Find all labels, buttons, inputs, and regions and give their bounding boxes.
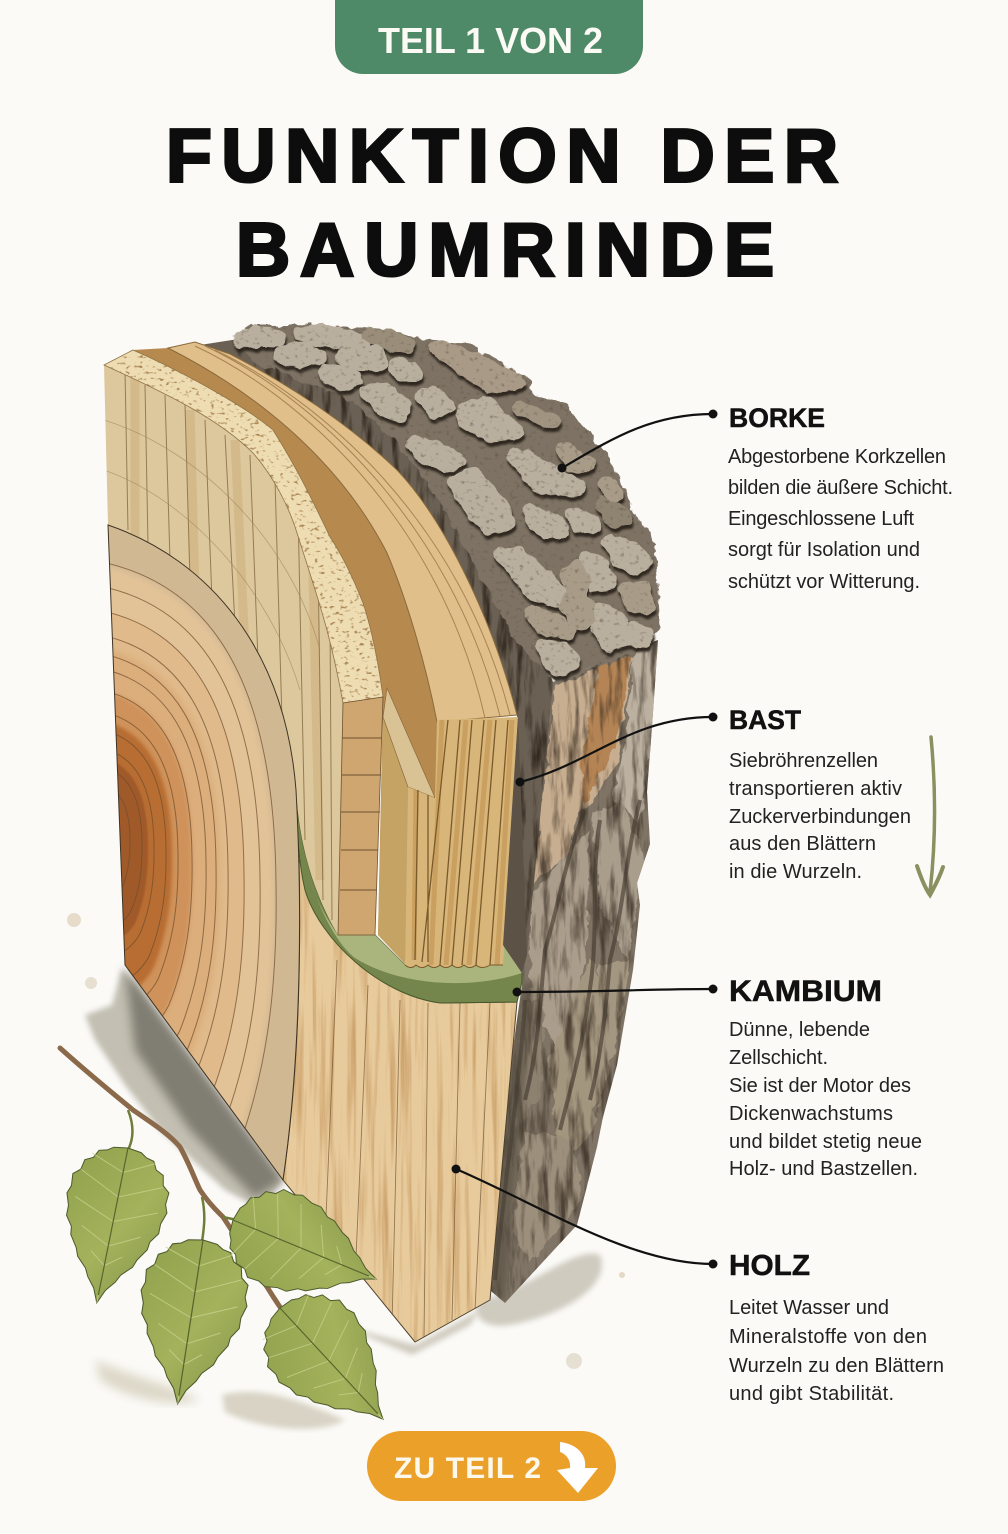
leaf 1 bbox=[47, 1138, 178, 1313]
label: Borke: bilden die äußere Schicht. bbox=[728, 477, 953, 499]
header badge bbox=[335, 0, 643, 74]
title: FUNKTION DER bbox=[166, 114, 838, 198]
sapwood front bbox=[280, 860, 520, 1350]
label: Bast: BAST bbox=[729, 705, 801, 735]
label: Bast: aus den Blättern bbox=[729, 833, 876, 855]
leader line: Bast bbox=[516, 712, 718, 786]
label: Kambium: KAMBIUM bbox=[729, 975, 882, 1008]
label: Holz: Leitet Wasser und bbox=[729, 1297, 889, 1319]
title: BAUMRINDE bbox=[236, 208, 774, 292]
inner tan panel bbox=[104, 365, 343, 935]
title bbox=[166, 114, 838, 292]
label: Bast: Zuckerverbindungen bbox=[729, 806, 911, 828]
twig bbox=[60, 1048, 280, 1307]
cork strip bbox=[100, 345, 390, 710]
leader line: Borke bbox=[558, 410, 718, 472]
label: Kambium: Dickenwachstums bbox=[729, 1103, 893, 1125]
twig with four leaves bbox=[47, 1048, 420, 1454]
label: Kambium: und bildet stetig neue bbox=[729, 1131, 922, 1153]
label: Borke: Abgestorbene Korkzellen bbox=[728, 446, 946, 468]
label: Holz bbox=[729, 1250, 944, 1405]
label: Holz: HOLZ bbox=[729, 1250, 810, 1282]
label: Holz: und gibt Stabilität. bbox=[729, 1383, 894, 1405]
bark tiles bbox=[240, 331, 647, 669]
leaf 3 bbox=[214, 1174, 395, 1325]
arrow: downward sugar transport bbox=[917, 737, 943, 895]
label: Borke: sorgt für Isolation und bbox=[728, 539, 920, 561]
dark gap between bast and bark bbox=[503, 717, 527, 973]
ground shadows and watercolor stains bbox=[67, 913, 625, 1429]
leader line: Holz bbox=[452, 1164, 718, 1268]
label: Borke: BORKE bbox=[729, 403, 825, 433]
inner small bast block bbox=[378, 688, 435, 964]
button: zu Teil 2: ZU TEIL 2 bbox=[394, 1452, 541, 1485]
label: Kambium: Zellschicht. bbox=[729, 1047, 828, 1069]
bark plates bbox=[512, 640, 660, 1262]
label: Holz: Mineralstoffe von den bbox=[729, 1326, 927, 1348]
leaf 4 bbox=[243, 1273, 420, 1454]
label: Kambium: Sie ist der Motor des bbox=[729, 1075, 911, 1097]
heartwood rings bbox=[108, 524, 300, 1182]
bast curved top strip bbox=[168, 342, 517, 722]
leader line: Kambium bbox=[512, 984, 718, 996]
label: Kambium: Holz- und Bastzellen. bbox=[729, 1158, 918, 1180]
label: Borke: schützt vor Witterung. bbox=[728, 571, 920, 593]
label: Bast bbox=[729, 705, 911, 883]
label: Kambium: Dünne, lebende bbox=[729, 1019, 870, 1041]
label: Borke bbox=[728, 403, 953, 593]
label: Kambium bbox=[729, 975, 922, 1180]
illustration: tree trunk cross-section bbox=[56, 320, 670, 1350]
label: Bast: transportieren aktiv bbox=[729, 778, 902, 800]
bast front with vertical fibres bbox=[405, 717, 518, 968]
label: Borke: Eingeschlossene Luft bbox=[728, 508, 914, 530]
header badge: TEIL 1 VON 2 bbox=[378, 20, 603, 61]
label: Bast: Siebröhrenzellen bbox=[729, 750, 878, 772]
cork front bbox=[338, 697, 383, 935]
bark dark cut side bbox=[200, 330, 560, 970]
kambium green layer bbox=[297, 803, 522, 1003]
label: Bast: in die Wurzeln. bbox=[729, 861, 862, 883]
bast inner brown side bbox=[133, 348, 480, 962]
tile speckle texture bbox=[225, 320, 665, 685]
label: Holz: Wurzeln zu den Blättern bbox=[729, 1355, 944, 1377]
bark front face bbox=[491, 640, 658, 1303]
bark top surface base bbox=[232, 325, 660, 682]
icon: curved down arrow bbox=[557, 1442, 598, 1493]
leaf 2 bbox=[125, 1232, 256, 1412]
button: zu Teil 2 bbox=[367, 1431, 616, 1501]
